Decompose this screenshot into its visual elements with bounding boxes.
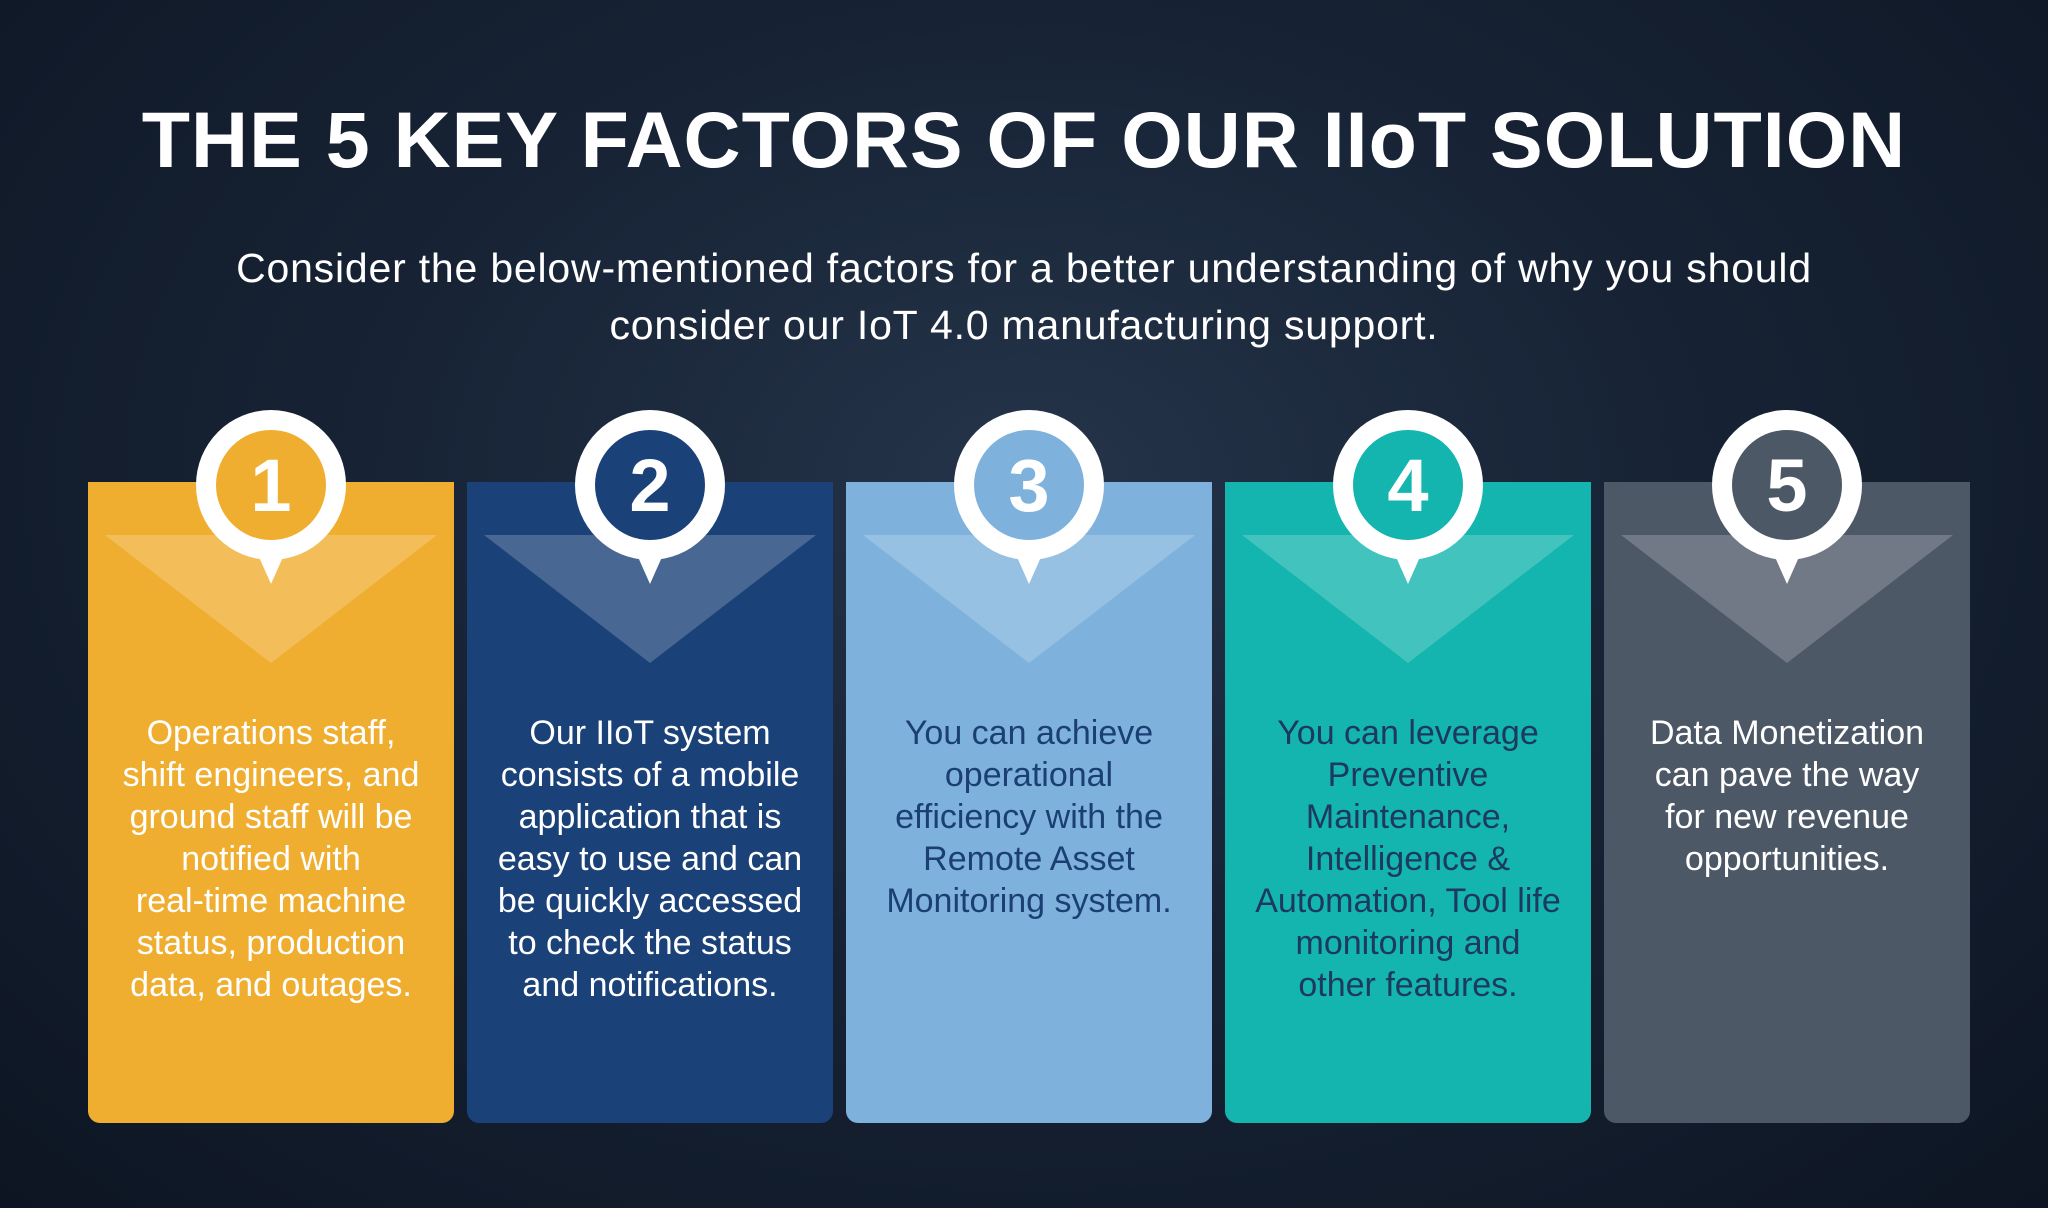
subtitle: Consider the below-mentioned factors for a better understanding of why you should: [236, 245, 1812, 291]
subtitle: [236, 245, 1812, 348]
text: factor 5: Data Monetization can pave the way for new revenue opportunities.: [1650, 714, 1924, 878]
icon: number 5 pin: 5: [1766, 444, 1808, 527]
panel: factor 5: [1604, 482, 1970, 1123]
text: factor 1: Operations staff, shift engineers, and ground staff will be notified with real-time machine status, production data, and outages.: [123, 714, 419, 1004]
icon: number 3 pin: [954, 410, 1104, 584]
icon: number 3 pin: 3: [1008, 444, 1050, 527]
panel: factor 4: [1225, 482, 1591, 1123]
panel: factor 3: [846, 482, 1212, 1123]
panel: factor 2: [467, 482, 833, 1123]
text: factor 4: You can leverage Preventive Maintenance, Intelligence & Automation, Tool life monitoring and other features.: [1255, 714, 1561, 1004]
icon: number 1 pin: 1: [250, 444, 292, 527]
icon: number 4 pin: [1333, 410, 1483, 584]
icon: number 2 pin: 2: [629, 444, 671, 527]
title: THE 5 KEY FACTORS OF OUR IIoT SOLUTION: [142, 95, 1906, 184]
icon: number 2 pin: [575, 410, 725, 584]
icon: number 5 pin: [1712, 410, 1862, 584]
text: factor 2: Our IIoT system consists of a mobile application that is easy to use and can be quickly accessed to check the status and notifications.: [498, 714, 802, 1004]
icon: number 1 pin: [196, 410, 346, 584]
subtitle: consider our IoT 4.0 manufacturing support.: [609, 302, 1439, 348]
text: factor 3: You can achieve operational efficiency with the Remote Asset Monitoring system.: [886, 714, 1172, 920]
panel: factor 1: [88, 482, 454, 1123]
icon: number 4 pin: 4: [1387, 444, 1429, 527]
